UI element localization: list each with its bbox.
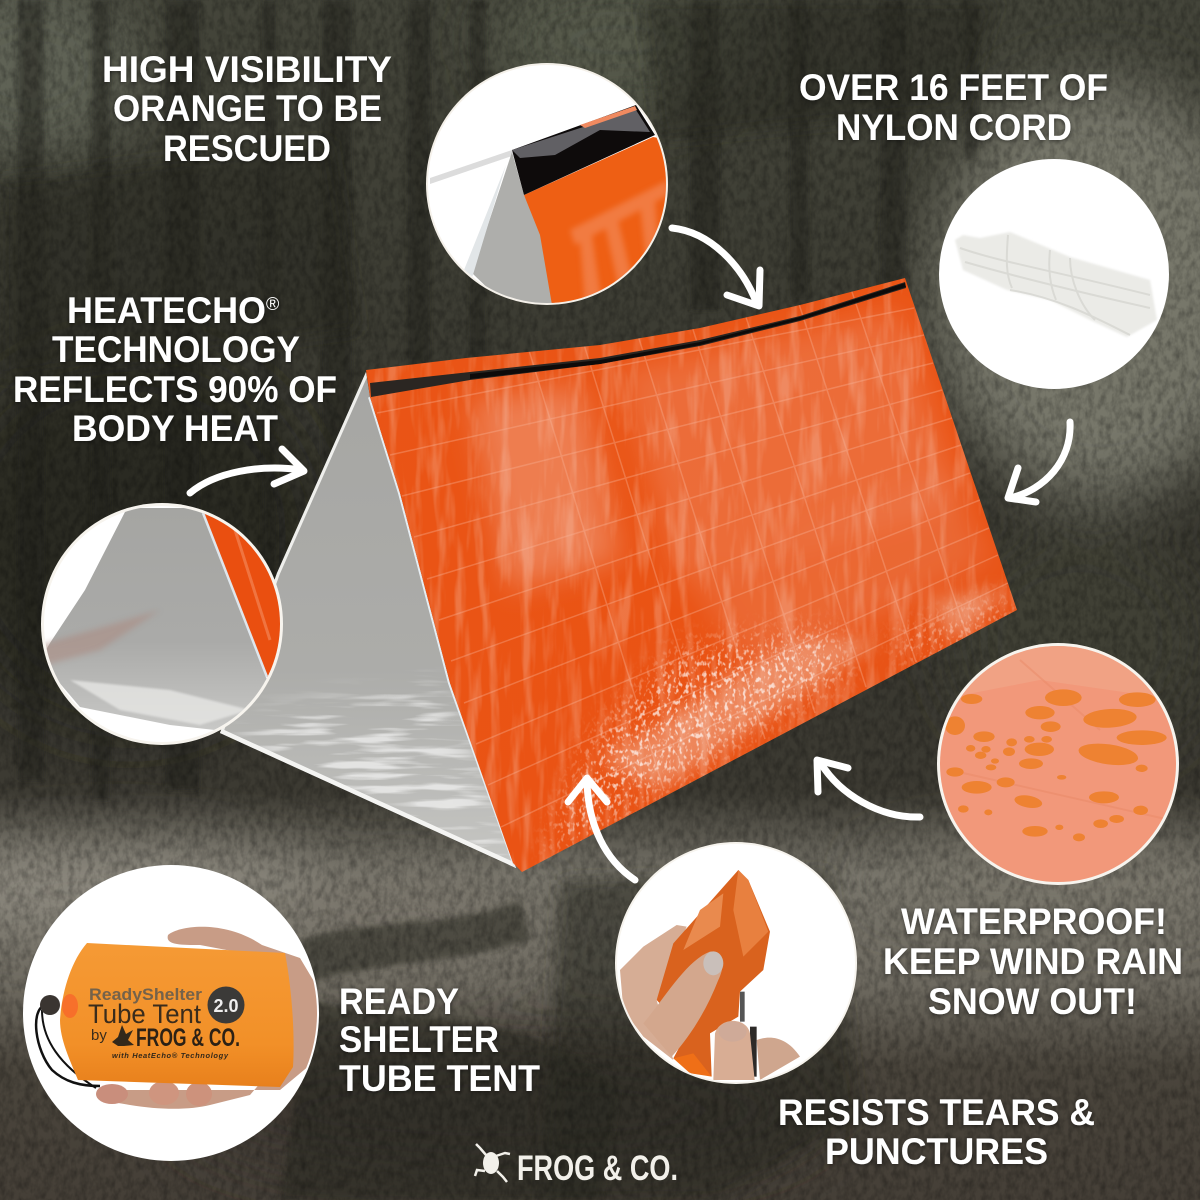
brand logo: frog and co: FROG & CO. — [517, 1149, 678, 1188]
cord coil — [955, 232, 1157, 337]
heading: ready shelter tube tent: READY — [339, 981, 459, 1022]
thumb — [658, 952, 722, 1056]
heading: resists tears and punctures — [778, 1092, 1095, 1172]
arrow: waterproof circle to tent — [817, 760, 920, 817]
lower finger — [713, 1021, 755, 1080]
callout circle: high visibility orange — [426, 63, 670, 305]
silver tent end — [472, 152, 555, 305]
bag label: with HeatEcho® Technology — [112, 1051, 229, 1060]
bag label: FROG & CO. — [136, 1024, 240, 1052]
black band — [512, 105, 655, 195]
heading: high visibility orange — [102, 49, 392, 169]
bag label: Tube Tent — [88, 999, 201, 1029]
bag label — [88, 986, 244, 1060]
orange side sliver — [203, 513, 280, 678]
heading: high visibility orange: ORANGE TO BE — [113, 88, 382, 129]
heading: nylon cord: NYLON CORD — [836, 107, 1072, 148]
bag label: by — [91, 1027, 107, 1044]
heading: waterproof: SNOW OUT! — [928, 981, 1137, 1022]
orange face — [524, 137, 670, 305]
tent — [200, 270, 1030, 880]
tent silver end — [220, 372, 516, 868]
bag label: ReadyShelter — [89, 986, 203, 1004]
arrow: heat reflect to silver end — [190, 449, 304, 493]
brand logo: frog and co — [475, 1144, 678, 1188]
heading: waterproof: WATERPROOF! — [901, 901, 1167, 942]
silver interior — [46, 508, 266, 730]
heading: waterproof — [883, 901, 1183, 1022]
heading: heatecho technology: TECHNOLOGY — [52, 329, 300, 370]
heading: heatecho technology: ® — [266, 294, 279, 314]
bag body — [60, 943, 294, 1087]
heading: ready shelter tube tent: TUBE TENT — [339, 1058, 540, 1099]
hand left — [620, 925, 687, 1060]
heading: high visibility orange: RESCUED — [163, 128, 331, 169]
orange foil — [657, 870, 770, 1077]
callout circle: tear resistant material in hands — [615, 842, 857, 1084]
heading: ready shelter tube tent: SHELTER — [339, 1019, 499, 1060]
droplets — [945, 689, 1167, 841]
right fingers — [757, 1038, 800, 1080]
icon: frog — [475, 1144, 510, 1182]
bag label: 2.0 — [213, 996, 239, 1016]
heading: high visibility orange: HIGH VISIBILITY — [102, 49, 392, 90]
hand — [118, 926, 317, 1109]
arrow: cord circle to tent — [1008, 422, 1070, 502]
pole — [740, 992, 745, 1022]
callout circle: nylon cord — [939, 159, 1169, 389]
arrow: top circle to tent ridge — [672, 228, 760, 306]
callout circle: packed tube tent bag in hand — [23, 865, 325, 1161]
heading: heatecho technology: BODY HEAT — [72, 408, 278, 449]
heading: nylon cord — [799, 67, 1108, 148]
arrow: tears circle to tent — [568, 778, 635, 880]
tent black top band — [370, 282, 906, 397]
callout circle: waterproof droplets — [937, 643, 1179, 885]
heading: ready shelter tube tent — [339, 981, 540, 1099]
heading: resists tears and punctures: PUNCTURES — [825, 1131, 1048, 1172]
heading: heatecho technology: REFLECTS 90% OF — [13, 369, 337, 410]
heading: resists tears and punctures: RESISTS TEARS & — [778, 1092, 1095, 1133]
callout circle: silver reflective interior — [40, 495, 300, 745]
cord and toggle — [36, 1005, 100, 1086]
heading: heatecho technology — [13, 290, 337, 449]
heading: heatecho technology: HEATECHO — [67, 290, 266, 331]
cord line — [430, 150, 512, 184]
heading: waterproof: KEEP WIND RAIN — [883, 941, 1183, 982]
heading: nylon cord: OVER 16 FEET OF — [799, 67, 1108, 108]
tent orange side — [360, 270, 1030, 880]
